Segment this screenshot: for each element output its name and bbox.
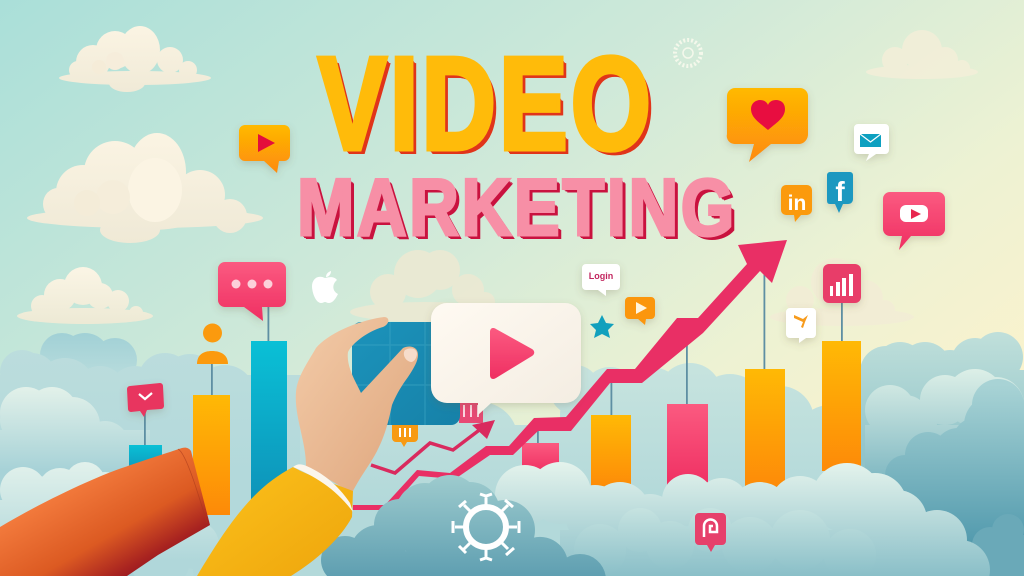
cloud bank: front puffs [574,508,876,576]
cloud bank: below sleeve [130,521,237,576]
bar chart: right bars [522,270,861,490]
bar chart: left bars [129,306,287,515]
icon: login bubble: Login [589,271,613,281]
icon: star [590,315,614,338]
cloud bank: front dark centre [321,475,606,576]
cloud bank: right mid light [865,369,1024,576]
cloud: top right faint [866,30,978,79]
icon: heart bubble [727,88,808,162]
icon: small pink tag under video card [459,402,483,423]
bar: orange [193,362,230,515]
video player card [431,303,581,415]
icon: linkedin: in [788,192,806,215]
cloud bank: left lower [0,462,121,576]
icon: person [197,324,228,364]
icon: virus emblem [453,494,519,560]
bar: orange 1 [591,375,631,490]
icon: gear [675,40,701,66]
blue tablet card [352,322,460,425]
title: MARKETING: MARKETING [297,163,737,253]
cloud bank: right bottom dark [957,514,1024,576]
bar: tall teal [251,306,287,509]
hand [296,317,418,493]
icon: pink app tile [695,513,726,552]
cloud: left large [27,133,263,243]
cloud bank: back left [0,350,420,576]
icon: facebook [827,172,853,213]
icon: login bubble [582,264,620,296]
cloud bank: left mid mint [0,387,150,576]
cloud: left mid [17,267,153,324]
bar: small pink [522,428,559,473]
play triangle [490,328,534,379]
icon: small orange play [625,297,655,325]
cloud bank: front light right [495,462,990,576]
icon: facebook: f [835,176,845,207]
icon: check bubble [127,383,164,417]
icon: orange play bubble [239,125,290,173]
cloud: top left small [59,26,211,92]
yellow sleeve [197,464,353,576]
bar: small teal [129,412,162,475]
cloud: center behind card [350,250,500,322]
icon: small orange tag under card [392,423,418,447]
icon: chat dots bubble [218,262,286,321]
icon: bar chart tile [823,264,861,303]
cloud bank: back centre [300,363,890,576]
cloud bank: back right [860,332,1024,576]
orange sleeve [0,448,210,576]
cloud bank: right deep [885,379,1024,576]
growth arrow: main [353,240,787,510]
icon: video bubble pink [883,192,945,250]
cloud bank: back left dark crest [40,333,137,383]
icon: linkedin [781,185,812,222]
growth arrow: small [371,420,495,473]
bar: pink [667,330,708,488]
bar: orange 2 [745,270,785,489]
icon: white bubble with orange mark [786,308,816,343]
cloud: right faint [770,258,914,326]
white cuff [293,464,353,512]
bar: orange 3 [822,300,861,471]
icon: apple [312,271,338,303]
title: VIDEO: VIDEO [318,30,654,177]
icon: mail bubble [854,124,889,161]
